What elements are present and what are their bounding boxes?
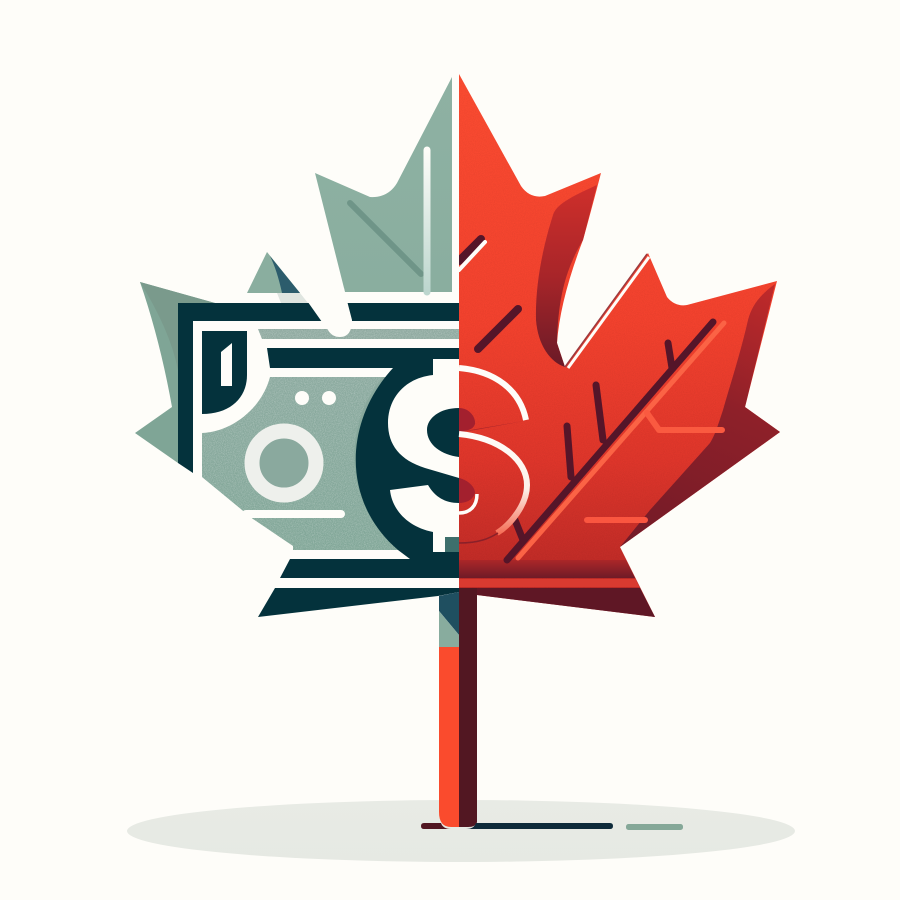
dark medallion and stripes — [267, 348, 459, 578]
banknote frame — [178, 303, 459, 473]
white note dots — [295, 391, 336, 405]
small sage lobe — [247, 252, 308, 303]
shaded right edge — [620, 284, 780, 547]
banknote sage field — [200, 375, 410, 553]
dollar sign left half — [388, 359, 459, 552]
ground line — [421, 823, 683, 830]
maroon vein — [478, 309, 713, 560]
red leaf body — [459, 74, 780, 617]
dark corner panel — [202, 331, 247, 414]
bottom dark band — [459, 560, 635, 578]
leaf grain — [459, 74, 784, 619]
left half: sage and dark-teal banknote — [135, 77, 459, 617]
shaded notch fold — [536, 185, 597, 367]
dotted sage band — [258, 329, 459, 339]
bottom left dark tip — [258, 588, 459, 617]
ground shadow — [127, 800, 795, 862]
stem — [439, 588, 477, 827]
bottom bright band — [459, 579, 640, 587]
white bar — [242, 510, 345, 518]
dollar sign right half — [459, 368, 527, 543]
orange vein — [518, 323, 724, 558]
bottom maroon tip — [459, 588, 655, 617]
right half: red maple leaf — [459, 74, 784, 619]
top sage lobe — [315, 77, 452, 292]
white ring — [252, 431, 316, 495]
notch edge double line — [565, 254, 649, 368]
left sage lobe — [135, 282, 215, 463]
top small vein — [459, 239, 485, 270]
white leaf notch cut — [298, 288, 352, 337]
centre white seam — [452, 75, 459, 292]
illustration: maple leaf half dollar bill — [127, 74, 795, 862]
